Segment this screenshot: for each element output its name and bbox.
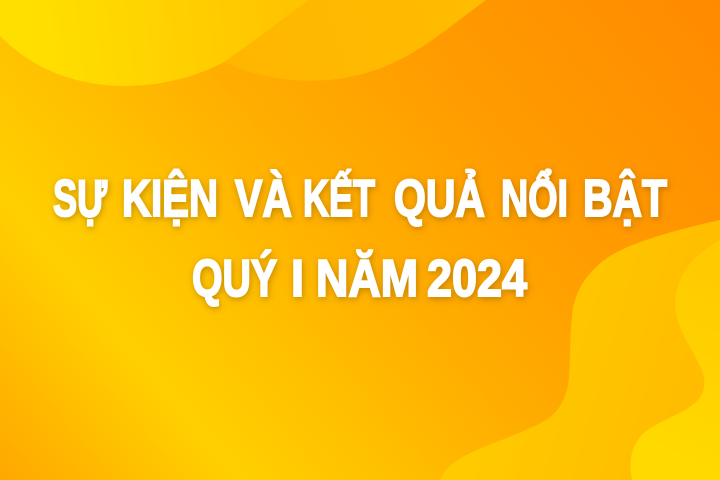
bottom right wave: back layer [440,220,720,480]
title line 2: QUÝ [192,249,277,308]
title line 1: VÀ [235,170,292,228]
top wave: back layer [224,0,486,81]
title line 2: NĂM [316,250,418,308]
top wave: front layer [0,0,309,86]
title line 1: BẬT [583,169,667,228]
title line 1: QUẢ [394,169,485,228]
bottom right wave: front layer [631,240,720,480]
title line 1: KIỆN [122,169,218,228]
title [53,169,667,308]
title line 1: KẾT [303,169,375,228]
title line 2: 2024 [427,250,527,308]
title line 2: I [291,250,304,308]
title line 1 [53,169,667,228]
title line 2 [192,249,527,308]
title line 1: NỔI [501,169,568,228]
title line 1: SỰ [53,170,108,228]
